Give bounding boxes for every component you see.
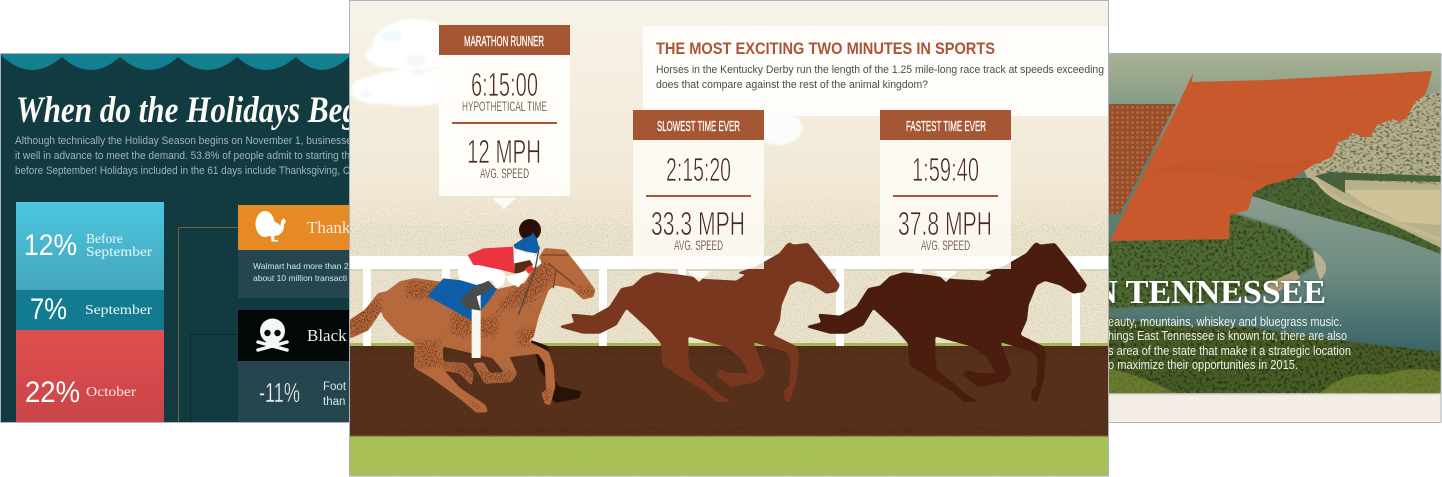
title panel: THE MOST EXCITING TWO MINUTES IN SPORTS [656, 39, 995, 58]
card: Black Friday: -11% [259, 377, 300, 408]
bar segment: September 7% [16, 290, 164, 330]
card: fastest time ever: 37.8 MPH [898, 205, 992, 242]
photo: city on far bank [1300, 90, 1441, 250]
horse: slowest time [559, 242, 840, 402]
scalloped top border [0, 54, 349, 70]
bar segment: before September 12%: 12% [24, 229, 77, 262]
bar segment: September 7%: 7% [30, 293, 67, 326]
card: Thanksgiving: Walmart had more than 2 [253, 261, 349, 271]
card: slowest time ever: 2:15:20 [666, 151, 731, 188]
jockey [427, 219, 542, 358]
boot [460, 281, 495, 311]
intro paragraph [15, 135, 357, 177]
pointer [934, 271, 958, 282]
coat speckle [350, 258, 594, 412]
card: Black Friday: Foot [323, 381, 347, 393]
background sky [350, 1, 1108, 225]
panel: holidays infographic (left) [0, 53, 358, 422]
card: marathon runner: MARATHON RUNNER [464, 33, 544, 50]
body text [1108, 315, 1351, 372]
speckled ground band [349, 180, 1109, 347]
card: slowest time ever [633, 110, 764, 282]
photo: forest peninsula [1108, 213, 1326, 308]
cloud left [350, 18, 442, 107]
card: slowest time ever: AVG. SPEED [674, 237, 723, 253]
girth [472, 295, 481, 358]
bar segment: October 22%: October [86, 384, 137, 399]
cloud middle [764, 116, 802, 146]
panel: horse racing infographic (center) [338, 0, 1109, 476]
card: marathon runner: 6:15:00 [471, 66, 538, 103]
card: slowest time ever: 33.3 MPH [651, 205, 745, 242]
card: marathon runner: AVG. SPEED [480, 165, 529, 181]
body text: hings East Tennessee is known for, there are also [1108, 329, 1347, 343]
bar segment: before September 12% [16, 202, 164, 290]
horse body and legs [338, 248, 602, 417]
photo: river [1108, 195, 1441, 352]
photo: forest foreground [1108, 318, 1441, 393]
title: When do the Holidays Beg [16, 90, 358, 131]
saddle cloth [427, 278, 497, 321]
intro paragraph: it well in advance to meet the demand. 53.8% of people admit to starting th [15, 150, 350, 162]
photo: far bank trees and road [1250, 178, 1441, 254]
intro paragraph: Although technically the Holiday Season begins on November 1, businesses [15, 135, 357, 147]
card: fastest time ever: 1:59:40 [912, 151, 979, 188]
arm [507, 272, 530, 287]
jersey [468, 247, 514, 273]
whip [518, 247, 539, 315]
card: fastest time ever [880, 110, 1011, 282]
halftone shadow of state shape [1108, 104, 1176, 214]
card: fastest time ever: AVG. SPEED [921, 237, 970, 253]
fence [349, 256, 1109, 346]
card: marathon runner: 12 MPH [467, 133, 541, 170]
bar segment: October 22% [16, 330, 164, 422]
dirt track [349, 346, 1109, 435]
bar segment: October 22%: 22% [25, 376, 80, 409]
card: marathon runner [439, 25, 570, 209]
card: marathon runner: HYPOTHETICAL TIME [462, 98, 547, 114]
title panel: does that compare against the rest of the animal kingdom? [656, 79, 928, 91]
title panel: Horses in the Kentucky Derby run the length of the 1.25 mile-long race track at speeds exceeding [656, 64, 1104, 76]
cap [513, 233, 539, 253]
bar segment: before September 12%: Before [86, 231, 123, 246]
body text: eauty, mountains, whiskey and bluegrass music. [1108, 315, 1342, 329]
horse: fastest time [806, 242, 1087, 402]
map: Tennessee shape [1110, 71, 1432, 241]
heading: EASTERN TENNESSEE [957, 274, 1326, 311]
body text: o maximize their opportunities in 2015. [1108, 358, 1298, 372]
card: Black Friday: than [323, 396, 345, 408]
card: Thanksgiving: about 10 million transacti [253, 273, 347, 283]
card: Black Friday [238, 310, 349, 422]
card: slowest time ever: SLOWEST TIME EVER [657, 118, 740, 135]
jockey trousers [458, 269, 506, 288]
grass [349, 435, 1109, 476]
icon: turkey [256, 211, 286, 242]
bar segment: before September 12%: September [86, 244, 153, 259]
bar segment: September 7%: September [85, 302, 153, 317]
pointer [687, 271, 711, 282]
body text: s area of the state that make it a strategic location [1108, 344, 1351, 358]
card: Thanksgiving: Thank [307, 218, 351, 237]
card: Black Friday: Black [307, 326, 347, 345]
title panel [643, 26, 1109, 116]
horse: marathon runner with jockey [338, 219, 602, 417]
icon: skull and crossbones [258, 318, 287, 350]
card: fastest time ever: FASTEST TIME EVER [906, 118, 986, 135]
intro paragraph: before September! Holidays included in the 61 days include Thanksgiving, C [15, 165, 350, 177]
panel: East Tennessee infographic (right) [1109, 54, 1440, 422]
card: Thanksgiving [238, 205, 351, 298]
pointer [492, 198, 516, 209]
